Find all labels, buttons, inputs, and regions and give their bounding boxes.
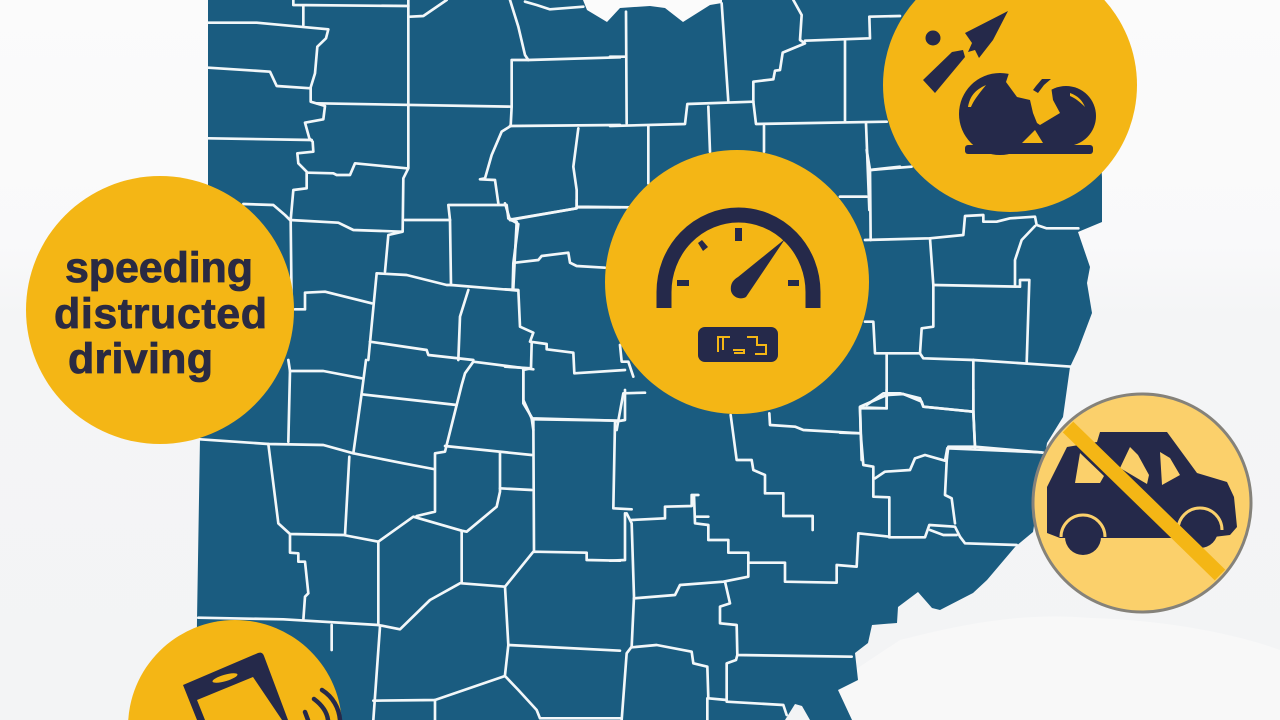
- car windows: [1075, 447, 1180, 485]
- map outline: [196, 0, 1102, 720]
- icon: signal waves: [305, 690, 340, 720]
- icon: phone: [183, 653, 288, 720]
- county lines: north centre: [610, 0, 900, 210]
- icon: car: [1047, 432, 1237, 538]
- icon: speedometer gauge: [664, 215, 813, 362]
- car wheels: [1061, 508, 1222, 555]
- icon: odometer label: [698, 327, 778, 362]
- text: speeding distructed driving: distructed: [54, 290, 267, 338]
- icon: arrow head: [965, 11, 1008, 58]
- text: speeding distructed driving: driving: [68, 335, 213, 383]
- map: state with county boundaries: [196, 0, 1102, 720]
- icon: bullet shard: [923, 50, 965, 93]
- icon: broken sphere: [959, 70, 1096, 155]
- callout: speeding distructed driving: [26, 176, 294, 444]
- callout: top right crash icon: [883, 0, 1137, 212]
- callout: phone: [128, 620, 342, 720]
- county lines: south west: [198, 360, 620, 720]
- text: speeding distructed driving: speeding: [65, 244, 253, 292]
- county lines: east: [840, 150, 1078, 460]
- icon: small fragment: [926, 30, 940, 46]
- callout: speedometer: [605, 150, 869, 414]
- prohibition stripe: [1068, 427, 1220, 575]
- county lines: south east: [610, 390, 1042, 720]
- county lines: north west: [208, 0, 620, 360]
- callout: no overloaded car: [1033, 394, 1251, 612]
- county lines: centre: [505, 200, 645, 430]
- text: speeding distructed driving: [54, 244, 267, 383]
